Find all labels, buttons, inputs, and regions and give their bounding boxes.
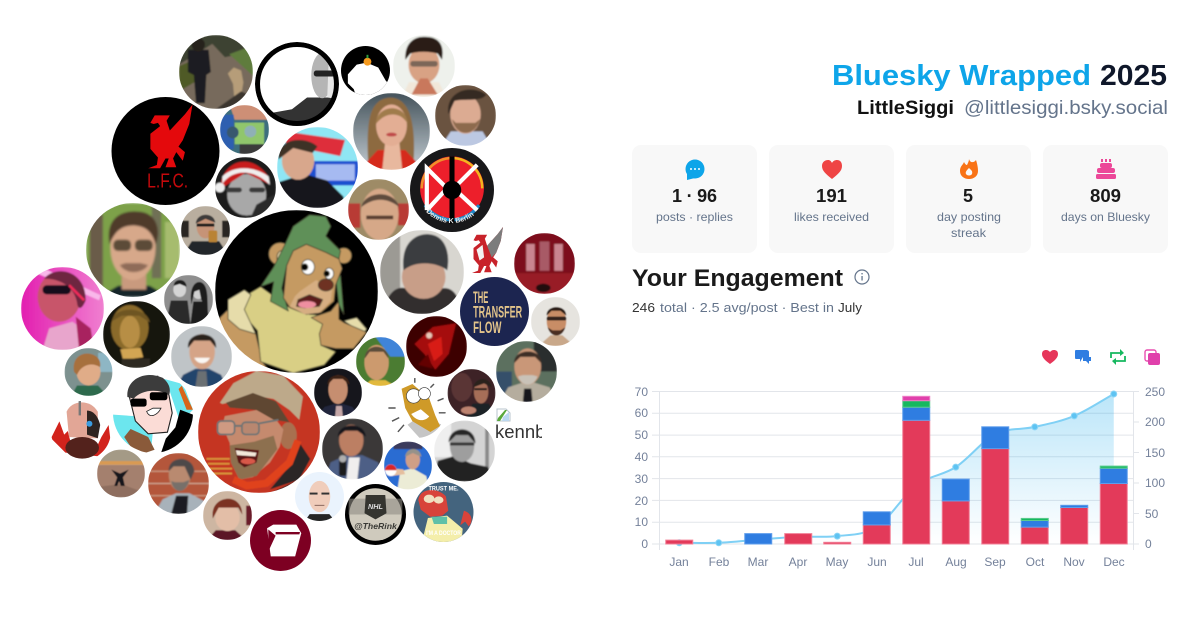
user name and handle: @littlesiggi.bsky.social [964,97,1168,119]
bars: replies [745,407,1127,544]
engagement summary line: total · 2.5 avg/post · Best in [660,300,834,315]
heading: Bluesky Wrapped 2025: Bluesky Wrapped [832,60,1091,92]
bars: reposts [903,401,1127,520]
broken avatar image with alt text kennb: kennb [495,421,545,442]
icon: chat bubble [686,160,704,180]
avatar: Zoidberg meme: I'M A DOCTOR [426,531,461,537]
heading: Bluesky Wrapped 2025: 2025 [1100,60,1167,92]
avatar: man with pink neon lights [21,267,104,350]
icon: birthday cake [1096,159,1116,179]
avatar: red phoenix [406,316,467,377]
month labels: Jul [908,555,924,569]
avatar: bearded man at brick wall [148,453,209,514]
avatar: curly-haired man with clasped hands [393,35,455,97]
icon: reposts [1111,349,1125,365]
avatar: blonde woman in red [353,93,430,170]
right axis labels: 150 [1145,446,1165,460]
avatar: red-haired child portrait [203,491,252,540]
icon: replies [1075,350,1091,364]
avatar: Dennis K Berlin logo: Dennis K Berlin [426,208,474,224]
user name and handle: LittleSiggi [857,97,954,119]
engagement summary line: 246 [632,300,655,315]
panel: avatar bubble cloud [21,35,580,571]
panel: posts and replies stat: 1 · 96 [672,186,717,206]
month labels: Aug [945,555,967,569]
avatar: ring with grayscale man [255,42,339,126]
avatar: NHL The Rink logo [345,484,406,545]
avatar: man throwing a Poké Ball [384,442,432,490]
avatar: Homer-style cartoon [388,378,446,438]
broken avatar image with alt text kennb [495,408,545,442]
left axis labels: 10 [635,515,648,529]
avatar: man speaking into microphone [322,418,383,480]
avatar: Zoidberg meme: TRUST ME. [428,485,459,492]
avatar: man with hands clasped in dim light [448,369,496,417]
panel: days on Bluesky stat: days on Bluesky [1061,210,1150,224]
right axis labels: 100 [1145,476,1165,490]
chart legend icons [1042,349,1160,365]
cumulative line [679,394,1114,543]
left axis labels: 20 [635,494,648,508]
avatar: young boy smiling [64,348,112,396]
right axis labels: 250 [1145,385,1165,399]
avatar: psychedelic face [220,105,269,154]
left axis labels: 40 [635,450,648,464]
avatar: The Transfer Flow podcast logo: THE [473,288,488,307]
icon: flame [960,159,978,179]
left axis labels [635,385,648,551]
avatar: walker with dog [179,35,253,109]
avatar: smiling man under blue sky [356,337,405,386]
month labels: Feb [709,555,730,569]
month labels: Apr [789,555,807,569]
avatar: bearded man in blue shirt [435,85,496,146]
avatar: man in suit with slicked hair [314,368,362,416]
panel: day posting streak stat: 5 [963,186,973,206]
avatar: white and red liver bird [472,227,503,273]
month labels: May [826,555,848,569]
icon: quotes [1145,350,1160,365]
panel: likes received stat: 191 [816,186,847,206]
panel: posts and replies stat [632,145,757,253]
panel: day posting streak stat: day posting [937,210,1001,224]
user name and handle [857,97,1168,119]
avatar: Zoidberg meme [414,482,474,542]
bars: likes [666,420,1127,544]
panel: likes received stat [769,145,894,253]
month labels: Jun [867,555,887,569]
right axis labels: 200 [1145,415,1165,429]
avatar: black and white couple [164,275,213,324]
left axis labels: 70 [635,385,648,399]
panel: posts and replies stat: posts · replies [656,210,733,224]
bars: quotes [903,396,930,401]
month labels [669,555,1125,569]
avatar: smiling man in blue jacket [171,326,232,387]
panel: days on Bluesky stat: 809 [1090,186,1121,206]
avatar: Gruffi Gummi bear cartoon [215,210,378,373]
avatar: balding man close-up [348,179,409,240]
engagement summary line [632,300,863,315]
panel: days on Bluesky stat [1043,145,1168,253]
chart gridlines and axes [652,392,1139,550]
panel: day posting streak stat [906,145,1031,253]
month labels: Oct [1026,555,1045,569]
avatar: polar bear with orange [341,46,390,95]
avatar: cartoon man with glasses and stars [113,374,193,452]
avatar: desert sunset [97,450,145,498]
icon: info [855,270,869,284]
avatar: man with glasses in green forest [86,203,180,297]
avatar: man with big smile in grey blazer [496,341,557,402]
avatar: Liverpool FC crest on black [112,97,220,205]
avatar: drinking man with glasses [181,206,230,255]
avatar: woman in grey beanie [380,230,464,314]
month labels: Dec [1103,555,1125,569]
left axis labels: 60 [635,406,648,420]
avatar: Dennis K Berlin logo [410,148,494,232]
avatar: NHL The Rink logo: NHL [368,502,384,511]
cumulative area [679,394,1114,544]
heading: Your Engagement: Your Engagement [632,265,843,292]
avatar: man in front of blue and red sign [277,127,358,208]
panel: likes received stat: likes received [794,210,869,224]
engagement summary line: July [838,300,863,315]
month labels: Mar [748,555,768,569]
avatar: red trophy room [514,233,575,294]
left axis labels: 30 [635,472,648,486]
month labels: Jan [669,555,689,569]
avatar: grayscale man with glasses [434,420,495,482]
month labels: Sep [984,555,1006,569]
panel: day posting streak stat: streak [951,226,987,240]
month labels: Nov [1063,555,1085,569]
right axis labels: 0 [1145,537,1152,551]
avatar: illustrated man with glasses [531,297,580,346]
avatar: The Transfer Flow podcast logo: FLOW [473,318,502,337]
avatar: Klopp poster illustration [198,371,320,493]
avatar: maroon logo with white box [250,510,311,571]
avatar: NHL The Rink logo: @TheRink [354,521,398,531]
avatar: woman in Santa hat [215,157,276,218]
avatar: Liverpool FC crest on black: L.F.C. [147,170,188,193]
stacked bar and line chart [635,385,1165,569]
icon: heart [822,160,842,179]
avatar: bald cartoon man [295,472,344,521]
left axis labels: 50 [635,428,648,442]
cumulative points [676,391,1117,546]
right axis labels: 50 [1145,507,1159,521]
left axis labels: 0 [641,537,648,551]
icon: likes [1042,350,1058,364]
avatar: red and black masked character [52,401,110,459]
right axis labels [1145,385,1165,551]
avatar: The Transfer Flow podcast logo [460,277,529,346]
avatar: golden statue head [103,301,170,368]
